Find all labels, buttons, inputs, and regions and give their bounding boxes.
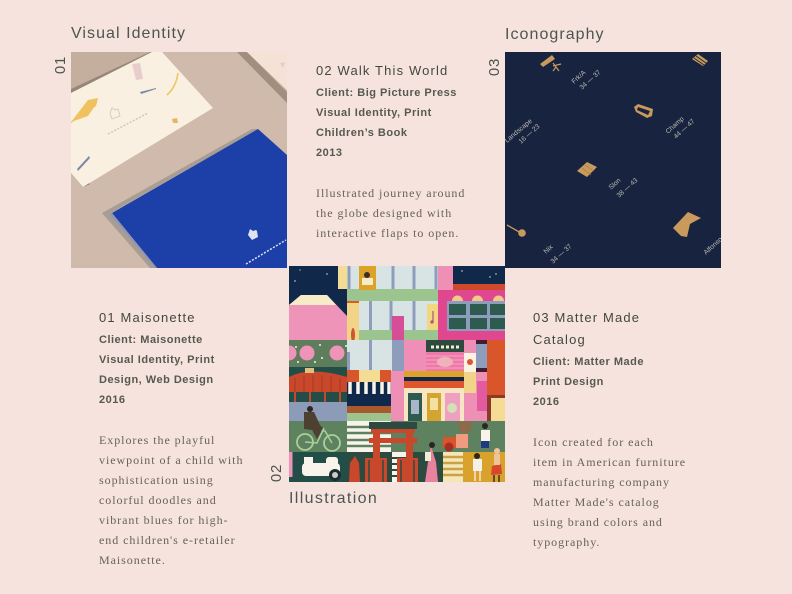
heading: Visual Identity: Visual Identity [71,25,186,42]
lower building row [347,340,505,375]
photo: gold icons on navy catalog [505,52,721,268]
project description [533,435,686,549]
project description: Icon created for each [533,435,654,449]
project meta: 2016 [99,394,125,406]
project title: 01 Maisonette [99,310,196,325]
project description: item in American furniture [533,455,686,469]
project meta [99,334,215,406]
photo: gold icons on navy catalog: Champ [665,115,686,135]
project description: typography. [533,535,600,549]
project description: manufacturing company [533,475,670,489]
photo: gold icons on navy catalog: 44 — 47 [673,118,697,140]
cherry blossoms and bridge [282,340,347,421]
project title: 02 Walk This World [316,63,448,78]
photo: gold icons on navy catalog: 38 — 43 [616,177,640,199]
project description: colorful doodles and [99,493,217,507]
project description: Maisonette. [99,553,166,567]
project description [99,433,243,567]
heading: Iconography: Iconography [505,26,605,43]
project meta: Visual Identity, Print [316,107,432,119]
crosswalk and torii gate [347,421,443,482]
section number 01: 01 [52,56,69,74]
kimono figure [425,442,438,482]
project meta: Children’s Book [316,127,407,139]
second crosswalk and yellow ground [443,448,505,482]
project description: Illustrated journey around [316,186,465,200]
city building [347,266,438,352]
photo: Maisonette stationery [71,52,287,268]
photo: gold icons on navy catalog: Frk/A [571,69,588,85]
project title [533,310,640,347]
white vehicle [289,452,347,482]
section number 03: 03 [486,58,503,76]
photo: gold icons on navy catalog: 16 — 23 [518,123,542,145]
project meta: Print Design [533,376,604,388]
text block: 01 Maisonette [99,310,243,567]
project meta: Visual Identity, Print [99,354,215,366]
project description: sophistication using [99,473,214,487]
project meta: Client: Matter Made [533,356,644,368]
photo: gold icons on navy catalog: Nix [543,243,555,255]
shop street [347,370,505,421]
project meta: Client: Maisonette [99,334,203,346]
project description: interactive flaps to open. [316,226,459,240]
project description: Matter Made's catalog [533,495,660,509]
project title: Catalog [533,332,586,347]
cart and pedestrian [443,422,490,452]
upper right building [438,266,505,340]
project meta: 2016 [533,396,559,408]
project description: end children's e-retailer [99,533,236,547]
artwork: Walk This World city illustration [289,266,505,482]
project description [316,186,465,240]
project description: vibrant blues for high- [99,513,228,527]
photo: gold icons on navy catalog: Slon [608,177,623,191]
project description: Explores the playful [99,433,215,447]
project description: using brand colors and [533,515,663,529]
photo: gold icons on navy catalog: 34 — 37 [579,69,603,91]
night sky and mountain [289,266,347,340]
project meta: 2013 [316,147,342,159]
project meta [316,87,457,159]
project meta: Design, Web Design [99,374,214,386]
project title: 03 Matter Made [533,310,640,325]
section number 02: 02 [268,464,285,482]
project description: viewpoint of a child with [99,453,243,467]
project description: the globe designed with [316,206,452,220]
project meta: Client: Big Picture Press [316,87,457,99]
cyclist [297,406,340,451]
heading: Illustration: Illustration [289,490,378,507]
text block: 02 Walk This World [316,63,465,240]
project meta [533,356,644,408]
photo: gold icons on navy catalog: 34 — 37 [550,243,574,265]
text block: 03 Matter Made Catalog [533,310,686,549]
